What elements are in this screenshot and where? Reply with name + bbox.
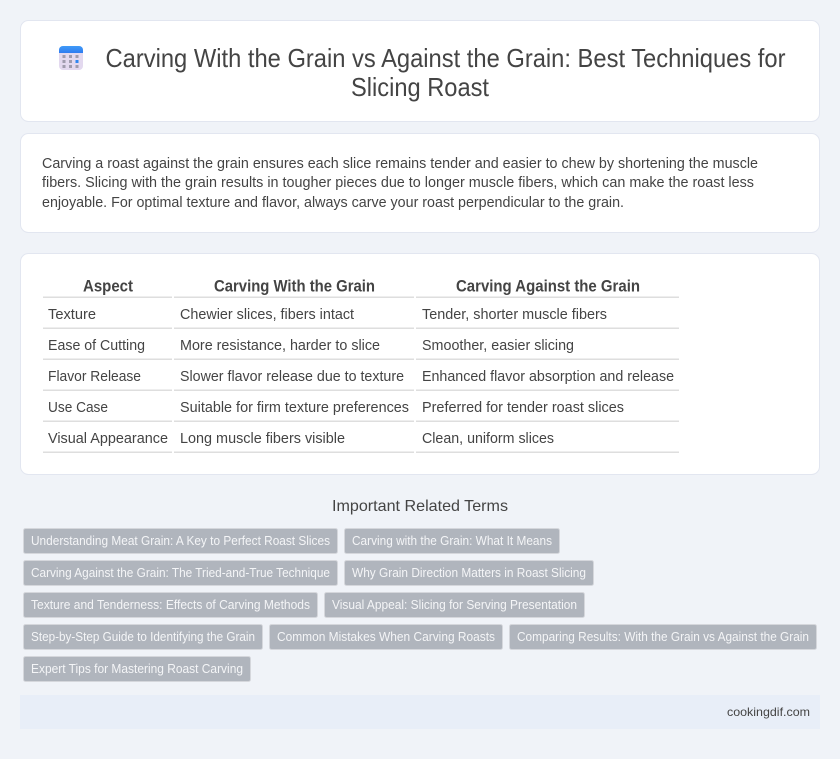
tag [24, 624, 262, 650]
row: ease of cutting [48, 338, 574, 354]
tag: Expert Tips for Mastering Roast Carving [31, 662, 243, 676]
row: texture [48, 307, 607, 323]
row: ease of cutting: Smoother, easier slicing [422, 338, 574, 354]
tag [24, 528, 338, 554]
tag: Common Mistakes When Carving Roasts [277, 630, 495, 644]
row: texture: Chewier slices, fibers intact [180, 307, 354, 323]
row: texture: Tender, shorter muscle fibers [422, 307, 607, 323]
row: ease of cutting: Ease of Cutting [48, 338, 145, 354]
tag [270, 624, 502, 650]
table header [83, 278, 640, 296]
panel: comparison table [20, 254, 820, 474]
footer: cookingdif.com [727, 705, 810, 719]
title: Slicing Roast [351, 72, 490, 102]
row: use case: Preferred for tender roast slices [422, 400, 624, 416]
panel: title header [20, 20, 820, 122]
row: visual appearance: Visual Appearance [48, 431, 168, 447]
tag [344, 528, 560, 554]
heading: important related terms: Important Related Terms [332, 498, 508, 515]
tag: Texture and Tenderness: Effects of Carving Methods [31, 598, 310, 612]
tag: Understanding Meat Grain: A Key to Perfect Roast Slices [31, 534, 330, 548]
related terms tags [24, 528, 816, 682]
footer [20, 695, 820, 729]
tag [344, 560, 594, 586]
tag [24, 560, 338, 586]
tag: Step-by-Step Guide to Identifying the Grain [31, 630, 255, 644]
tag [510, 624, 816, 650]
tag: Visual Appeal: Slicing for Serving Presentation [332, 598, 577, 612]
row: flavor release [48, 369, 674, 385]
table header: Carving Against the Grain [456, 278, 640, 296]
tag: Why Grain Direction Matters in Roast Slicing [352, 566, 586, 580]
table header: Carving With the Grain [214, 278, 375, 296]
text block: summary: fibers. Slicing with the grain results in tougher pieces due to longer muscle fibers, which can make the roast less [42, 175, 754, 191]
row: visual appearance: Clean, uniform slices [422, 431, 554, 447]
tag [24, 592, 318, 618]
text block: summary: enjoyable. For optimal texture and flavor, always carve your roast perpendicular to the grain. [42, 195, 624, 211]
tag: Comparing Results: With the Grain vs Against the Grain [517, 630, 809, 644]
tag [24, 656, 250, 682]
row: visual appearance [48, 431, 554, 447]
row: flavor release: Enhanced flavor absorption and release [422, 369, 674, 385]
text block: summary [42, 156, 758, 211]
row: flavor release: Flavor Release [48, 369, 141, 385]
row: texture: Texture [48, 307, 96, 323]
tag [324, 592, 584, 618]
title: Carving With the Grain vs Against the Grain: Best Techniques for [106, 43, 786, 73]
row: visual appearance: Long muscle fibers visible [180, 431, 345, 447]
icon: calendar [59, 46, 83, 70]
tag: Carving with the Grain: What It Means [352, 534, 552, 548]
row: use case: Use Case [48, 400, 108, 416]
row: use case: Suitable for firm texture preferences [180, 400, 409, 416]
row: use case [48, 400, 624, 416]
text block: summary: Carving a roast against the grain ensures each slice remains tender and easier to chew by shortening the muscle [42, 156, 758, 172]
table header: Aspect [83, 278, 133, 296]
panel: summary paragraph [20, 134, 820, 232]
title [106, 43, 786, 102]
tag: Carving Against the Grain: The Tried-and-True Technique [31, 566, 330, 580]
row: ease of cutting: More resistance, harder to slice [180, 338, 380, 354]
row: flavor release: Slower flavor release due to texture [180, 369, 404, 385]
